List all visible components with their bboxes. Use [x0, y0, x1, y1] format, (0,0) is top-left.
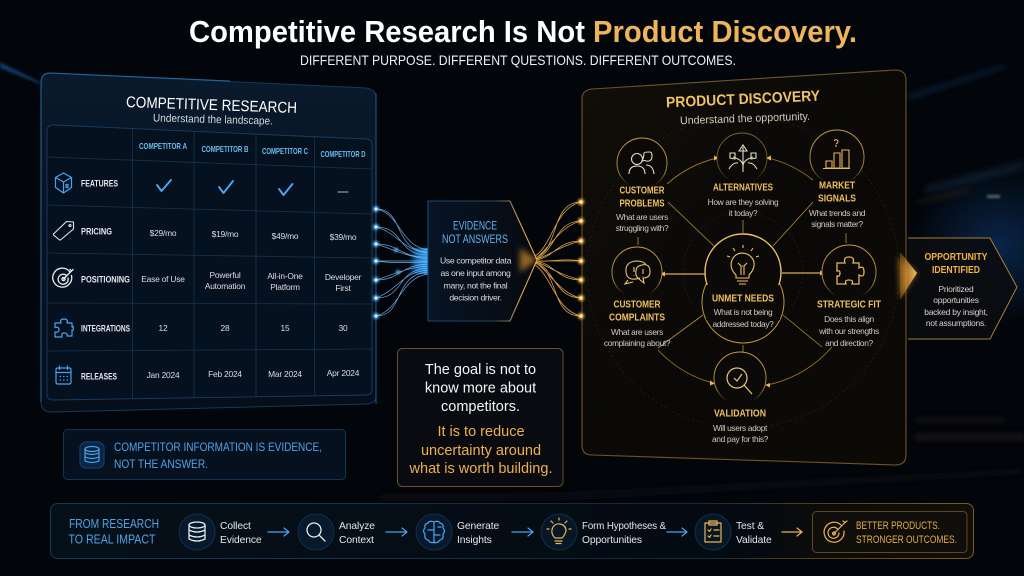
label and question: CUSTOMER: [614, 298, 661, 310]
outcome box: [812, 512, 967, 552]
step: test and validate: [695, 514, 772, 550]
arrow: [386, 528, 407, 536]
row label: integrations: INTEGRATIONS: [81, 324, 130, 334]
label and question: addressed today?: [713, 319, 774, 329]
node: customer problems: [616, 138, 669, 233]
positioning values: First: [335, 283, 352, 293]
step text: [457, 521, 500, 546]
positioning values: Developer: [325, 272, 362, 282]
icon: lightbulb: [547, 518, 571, 544]
step text: [736, 521, 772, 546]
column headers: COMPETITOR B: [202, 144, 248, 154]
step text: Collect: [220, 521, 251, 532]
opportunity heading: OPPORTUNITY: [924, 251, 988, 263]
row label: releases: RELEASES: [81, 372, 117, 382]
label and question: MARKET: [819, 180, 855, 192]
step text: Generate: [457, 521, 500, 532]
process strip: [50, 504, 974, 558]
blue flow connectors: [373, 93, 430, 404]
label and question: What are users: [611, 327, 663, 337]
step text: Evidence: [220, 535, 262, 546]
heading: product discovery: PRODUCT DISCOVERY: [666, 88, 820, 111]
icon: lightbulb: [727, 245, 759, 284]
callout text: COMPETITOR INFORMATION IS EVIDENCE,: [114, 440, 322, 454]
icon: database: [80, 442, 104, 468]
node: strategic fit: [817, 245, 881, 348]
integrations values: 30: [339, 323, 348, 333]
outcome text: [856, 520, 957, 546]
pricing values: $39/mo: [330, 232, 357, 242]
subheading: Understand the opportunity.: [680, 111, 810, 127]
step text: Test &: [736, 521, 764, 532]
strip heading: TO REAL IMPACT: [68, 532, 156, 546]
callout: evidence: [64, 430, 346, 480]
pentagon body: [440, 256, 512, 302]
step: collect evidence: [179, 514, 262, 550]
label and question: STRATEGIC FIT: [817, 298, 881, 310]
goal text gold: uncertainty around: [421, 443, 541, 459]
positioning values: Platform: [270, 282, 300, 292]
node: validation: [712, 352, 769, 444]
label and question: and pay for this?: [712, 434, 769, 444]
feature checks: [157, 180, 348, 195]
step text: Analyze: [339, 521, 375, 532]
label and question: VALIDATION: [714, 408, 766, 420]
pentagon body: as one input among: [440, 268, 511, 278]
node: alternatives: [708, 133, 779, 218]
icon: puzzle piece: [837, 257, 864, 284]
opportunity body: Prioritized: [938, 284, 974, 294]
icon: positioning target: [53, 268, 73, 287]
goal text gold: what is worth building.: [408, 461, 552, 477]
icon: database: [189, 522, 205, 541]
integrations values: 15: [281, 323, 290, 333]
arrow: [667, 528, 687, 536]
arrow: [512, 528, 533, 536]
node: customer complaints: [604, 247, 671, 348]
label and question: signals matter?: [811, 219, 863, 229]
label and question: [809, 180, 866, 229]
release dates: Mar 2024: [268, 369, 302, 379]
opportunity heading: IDENTIFIED: [932, 264, 980, 276]
label and question: struggling with?: [616, 223, 669, 233]
icon: pricing tag: [54, 222, 74, 240]
icon: bar chart: [823, 140, 850, 168]
pentagon body: Use competitor data: [440, 256, 512, 266]
label and question: How are they solving: [708, 197, 779, 207]
pricing values: $19/mo: [212, 229, 239, 239]
label and question: with our strengths: [818, 326, 879, 336]
pentagon heading: NOT ANSWERS: [442, 234, 508, 246]
icon: target: [824, 521, 847, 542]
callout text: NOT THE ANSWER.: [114, 457, 208, 471]
step text: Validate: [736, 535, 772, 546]
opportunity body: backed by insight,: [924, 307, 988, 317]
step text: Insights: [457, 535, 492, 546]
icon: people with question: [629, 152, 654, 174]
positioning values: All-in-One: [267, 271, 303, 281]
label and question: [604, 298, 671, 348]
pentagon body: many, not the final: [444, 280, 508, 290]
panel: product discovery: [582, 70, 906, 465]
icon: features cube: [56, 173, 72, 193]
release dates: Jan 2024: [147, 370, 180, 380]
icon: brain: [424, 521, 444, 543]
step text: [220, 521, 262, 546]
gold flow connectors: [520, 199, 584, 319]
release dates: Feb 2024: [208, 369, 242, 379]
step: form hypotheses: [541, 514, 666, 550]
step: generate insights: [416, 514, 500, 550]
outcome text: BETTER PRODUCTS.: [856, 520, 940, 532]
label and question: complaining about?: [604, 338, 671, 348]
pentagon body: decision driver.: [449, 292, 502, 302]
positioning values: [141, 270, 362, 293]
column headers: COMPETITOR D: [320, 149, 366, 159]
label and question: What trends and: [809, 208, 866, 218]
label and question: [817, 298, 881, 348]
subheading: Understand the landscape.: [153, 112, 273, 128]
panel: competitive research: [41, 73, 376, 412]
goal text white: [425, 362, 536, 415]
orbit rings and spokes: [587, 116, 899, 428]
integrations values: 28: [221, 323, 230, 333]
goal text white: know more about: [425, 380, 536, 396]
opportunity body: [924, 284, 988, 328]
pricing values: $29/mo: [150, 228, 177, 238]
comparison table: [47, 125, 372, 400]
strip heading: FROM RESEARCH: [69, 517, 159, 531]
goal text white: competitors.: [441, 399, 520, 415]
opportunity body: not assumptions.: [926, 318, 986, 328]
outcome text: STRONGER OUTCOMES.: [856, 534, 957, 546]
node: market signals: [809, 130, 866, 229]
step text: Opportunities: [582, 535, 642, 546]
column headers: COMPETITOR A: [139, 141, 187, 151]
goal text white: The goal is not to: [425, 362, 536, 378]
label and question: CUSTOMER: [620, 184, 665, 196]
positioning values: Ease of Use: [141, 274, 185, 284]
label and question: PROBLEMS: [620, 198, 664, 210]
icon: speech bubbles: [625, 261, 650, 284]
label and question: UNMET NEEDS: [712, 292, 774, 304]
integrations values: 12: [159, 323, 168, 333]
pricing values: $49/mo: [272, 231, 299, 241]
label and question: [616, 184, 669, 233]
icon: integrations puzzle: [55, 319, 73, 337]
step text: [339, 521, 375, 546]
positioning values: Powerful: [210, 270, 241, 280]
step: analyze context: [298, 514, 375, 550]
label and question: [712, 292, 774, 329]
pentagon heading: EVIDENCE: [453, 220, 497, 232]
label and question: SIGNALS: [818, 192, 856, 204]
label and question: Does this align: [824, 314, 875, 324]
node: unmet needs hub: [702, 234, 784, 343]
goal text gold: [408, 424, 552, 477]
release dates: [147, 368, 360, 380]
icon: releases calendar: [56, 366, 71, 384]
arrow into opportunity: [898, 252, 917, 300]
arrow: [268, 528, 289, 536]
icon: diverging arrows: [729, 145, 757, 172]
step text: [582, 521, 666, 546]
positioning values: Automation: [205, 281, 246, 291]
evidence not answers pentagon: [428, 201, 537, 321]
row label: pricing: PRICING: [81, 226, 112, 236]
label and question: Will users adopt: [713, 423, 768, 433]
title: Competitive Research Is Not Product Discovery.: [189, 14, 857, 49]
label and question: it today?: [729, 208, 758, 218]
goal text gold: It is to reduce: [437, 424, 525, 440]
step text: Context: [339, 535, 374, 546]
label and question: ALTERNATIVES: [713, 182, 773, 194]
icon: clipboard: [705, 521, 721, 542]
label and question: What are users: [616, 212, 668, 222]
label and question: [708, 182, 779, 218]
column headers: COMPETITOR C: [262, 146, 308, 156]
icon: magnifier: [307, 523, 325, 541]
row label: features: FEATURES: [81, 178, 118, 188]
strip heading: [68, 517, 159, 546]
pricing values: [150, 228, 357, 242]
icon: magnifier check: [734, 374, 752, 394]
pentagon heading: [442, 220, 508, 246]
label and question: [712, 408, 769, 444]
step text: Form Hypotheses &: [582, 521, 666, 532]
subtitle: DIFFERENT PURPOSE. DIFFERENT QUESTIONS. DIFFERENT OUTCOMES.: [300, 52, 736, 68]
opportunity body: opportunities: [933, 295, 979, 305]
label and question: and direction?: [825, 338, 874, 348]
release dates: Apr 2024: [327, 368, 360, 378]
callout text: [114, 440, 322, 471]
heading: competitive research: COMPETITIVE RESEARCH: [126, 94, 297, 117]
column headers: [139, 141, 366, 159]
label and question: COMPLAINTS: [609, 312, 665, 324]
opportunity identified pentagon: [908, 238, 1017, 339]
integrations values: [159, 323, 348, 333]
label and question: What is not being: [714, 307, 773, 317]
opportunity heading: [924, 251, 988, 276]
goal statement box: [398, 348, 563, 486]
row label: positioning: POSITIONING: [81, 274, 130, 284]
arrow: [782, 528, 802, 536]
